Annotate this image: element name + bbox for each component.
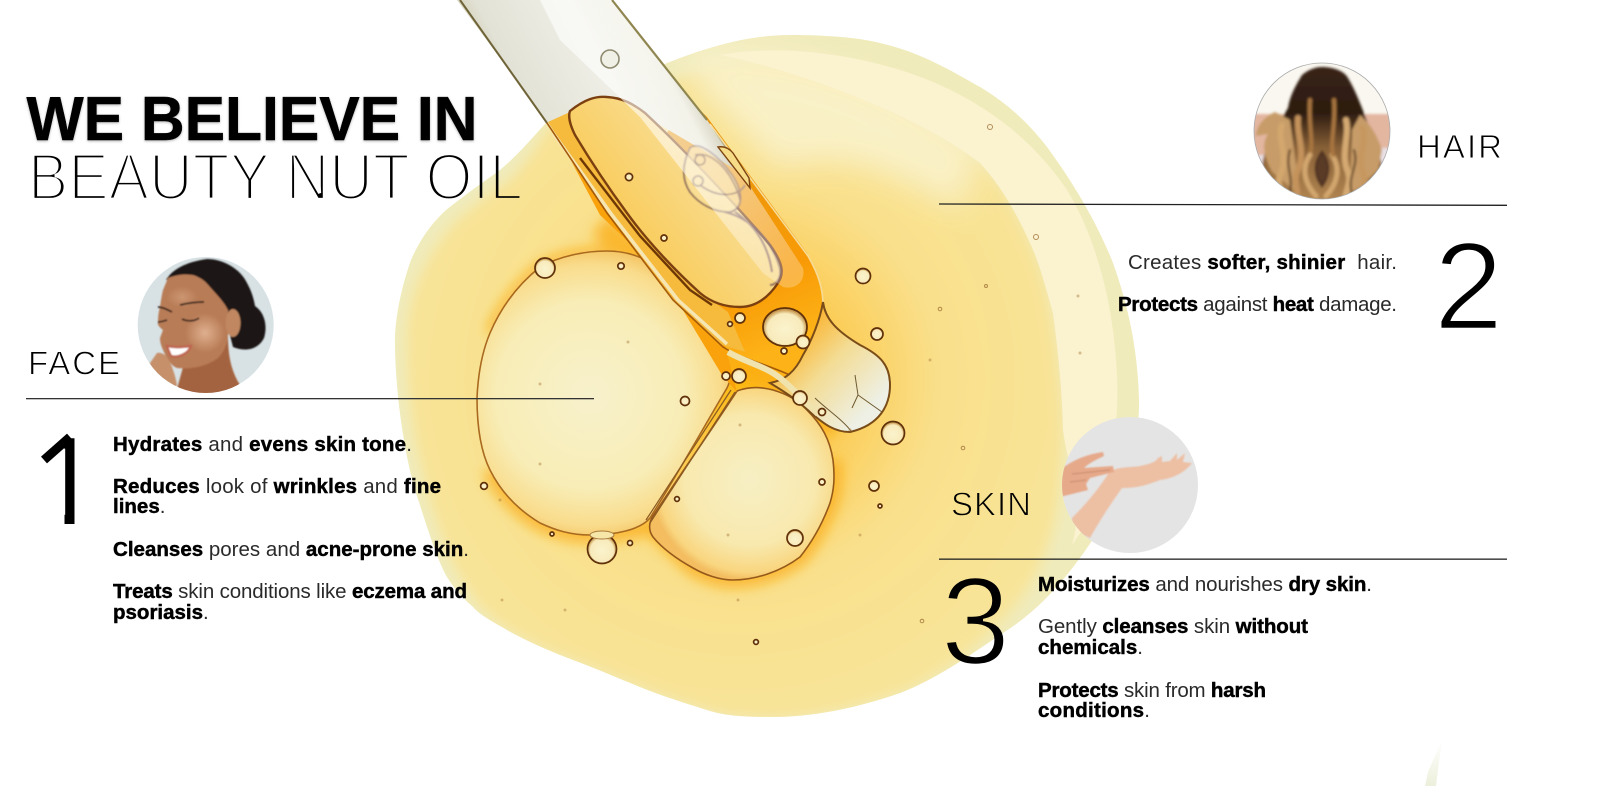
pipette: lower strip of oil	[552, 125, 737, 392]
rule	[939, 558, 1507, 560]
text block: skin benefits	[1038, 573, 1372, 722]
panel: hair	[939, 61, 1507, 356]
label: skin: SKIN	[951, 486, 1031, 522]
pipette: tip crack	[815, 375, 882, 431]
label: hair: HAIR	[1417, 128, 1502, 165]
pipette: oil plug	[569, 97, 782, 307]
text block: skin benefits: Moisturizes and nourishes dry skin.	[1038, 573, 1372, 596]
big bubble near tip	[763, 308, 807, 346]
text block: hair benefits	[1118, 251, 1397, 316]
text block: face benefits: Treats skin conditions like eczema and	[113, 580, 467, 603]
faint corner shape	[1425, 740, 1442, 786]
eyebrows and eyes	[158, 302, 204, 322]
pipette: highlight stripe	[540, 0, 803, 288]
rule	[939, 204, 1507, 205]
panel: face	[26, 255, 594, 624]
text block: face benefits: lines.	[113, 495, 165, 518]
oil blob	[395, 35, 1139, 718]
text block: face benefits: Cleanses pores and acne-prone skin.	[113, 538, 469, 561]
pipette: right wall	[612, 0, 707, 120]
photo: hands	[1060, 415, 1200, 555]
panel: skin	[939, 415, 1507, 722]
blob: main yellow body	[407, 64, 1063, 718]
text block: skin benefits: conditions.	[1038, 699, 1150, 722]
text block: face benefits: psoriasis.	[113, 601, 209, 624]
pipette: oil wall right	[710, 124, 823, 305]
numeral 1	[41, 434, 74, 524]
hair and bun	[166, 259, 266, 350]
blob: orange glow around bubbles	[490, 225, 835, 580]
photo: woman's face	[136, 255, 276, 396]
pipette: inner dark line	[580, 158, 712, 305]
pipette: window shape	[718, 147, 750, 188]
neck	[176, 338, 240, 393]
rule	[26, 398, 594, 399]
bubble: large left	[477, 251, 730, 535]
mouth	[167, 346, 191, 357]
pipette: left wall lower	[547, 123, 790, 375]
ear	[226, 309, 240, 337]
text block: face benefits: Reduces look of wrinkles and fine	[113, 475, 441, 498]
blob: pale top wash	[680, 48, 980, 210]
oil bubbles	[481, 50, 1082, 644]
text block: hair benefits: Protects against heat damage.	[1118, 293, 1397, 316]
title: thin line: BEAUTY NUT OIL	[28, 140, 523, 213]
pipette: orange oil surrounding glass	[640, 100, 840, 385]
text block: skin benefits: Protects skin from harsh	[1038, 679, 1266, 702]
blob: pale right band	[720, 50, 1117, 545]
pipette: pale glass line	[553, 133, 727, 344]
pipette	[457, 0, 890, 432]
pipette: lower glass band	[728, 352, 818, 414]
bubble: large lower right	[650, 388, 834, 580]
text block: face benefits	[113, 433, 469, 624]
photo outline	[1254, 63, 1390, 199]
pipette: swirl	[684, 146, 780, 285]
pipette air bubble	[601, 50, 619, 68]
pipette: glass tip	[770, 302, 890, 432]
text block: hair benefits: Creates softer, shinier hair.	[1128, 251, 1397, 274]
text block: skin benefits: Gently cleanses skin without	[1038, 615, 1308, 638]
numeral 2: 2	[1434, 218, 1503, 356]
numeral 1: 1	[34, 413, 103, 551]
bubble seam: double line between large bubbles	[646, 390, 735, 523]
title	[26, 85, 523, 213]
hand	[150, 352, 178, 386]
photo: wavy hair	[1252, 61, 1392, 205]
title: bold line: WE BELIEVE IN	[26, 85, 478, 154]
numeral 3: 3	[941, 553, 1010, 691]
text block: face benefits: Hydrates and evens skin tone.	[113, 433, 412, 456]
blob: outer rim	[395, 35, 1139, 717]
pipette: glass tube upper	[457, 0, 750, 178]
label: face: FACE	[28, 344, 120, 382]
pipette: left wall line	[460, 0, 547, 123]
text block: skin benefits: chemicals.	[1038, 636, 1143, 659]
pipette: lower glass wall band	[548, 112, 745, 352]
face skin	[158, 274, 228, 368]
